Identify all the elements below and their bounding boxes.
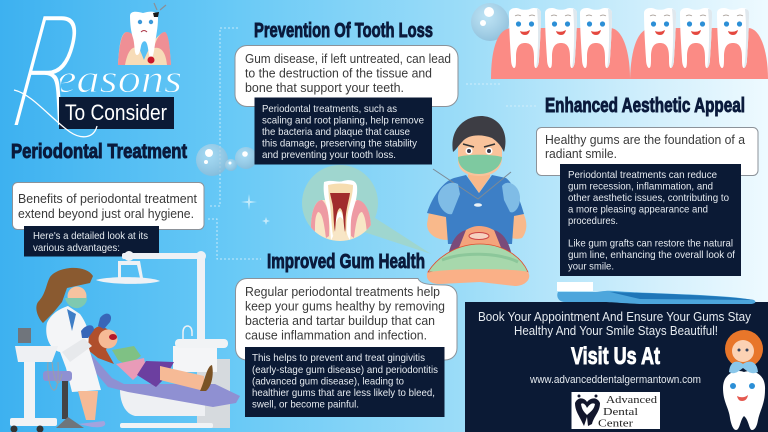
visit us heading: Visit Us At bbox=[571, 343, 660, 370]
icon: dental clinic scene bbox=[10, 251, 240, 432]
eyes bbox=[466, 148, 472, 154]
white card: bone that support your teeth. bbox=[245, 80, 404, 95]
dark card: Periodontal treatments can reduce bbox=[568, 169, 717, 181]
white card bbox=[536, 128, 758, 176]
icon: sad tooth with cavity bbox=[118, 3, 171, 65]
dark card: scaling and root planing, help remove bbox=[262, 114, 424, 126]
icon: tooth with girl bbox=[723, 330, 765, 430]
dark card: other aesthetic issues, contributing to bbox=[568, 192, 729, 204]
logo: Advanced bbox=[606, 394, 658, 406]
dark card: and preventing your tooth loss. bbox=[262, 149, 396, 161]
dark card: your smile. bbox=[568, 260, 614, 272]
website url: www.advanceddentalgermantown.com bbox=[529, 374, 701, 386]
mask bbox=[458, 155, 502, 174]
dark card: procedures. bbox=[568, 215, 618, 227]
title script word: easons bbox=[56, 56, 182, 101]
sparkles bbox=[241, 194, 270, 225]
heading: Prevention Of Tooth Loss bbox=[254, 20, 433, 42]
instrument tray bbox=[10, 328, 62, 432]
icon: tooth cross-section magnifier bbox=[302, 165, 431, 254]
dark card: (advanced gum disease), leading to bbox=[252, 376, 404, 388]
white card: to the destruction of the tissue and bbox=[245, 66, 432, 80]
patient bbox=[88, 326, 213, 391]
dark card: Periodontal treatments, such as bbox=[262, 103, 397, 115]
icon: bubble top bbox=[471, 3, 509, 41]
logo: Center bbox=[598, 418, 633, 430]
appointment text: Healthy And Your Smile Stays Beautiful! bbox=[514, 323, 718, 338]
patient head bbox=[450, 226, 510, 252]
title bbox=[0, 0, 187, 163]
swash bbox=[14, 90, 97, 137]
dark card: (early-stage gum disease) and periodontitis bbox=[252, 364, 438, 376]
logo bbox=[572, 392, 660, 430]
dark card: Like gum grafts can restore the natural bbox=[568, 238, 733, 250]
title script word bbox=[0, 0, 182, 162]
panel: call to action bbox=[465, 302, 768, 432]
dark card: various advantages: bbox=[33, 242, 120, 254]
dark card: This helps to prevent and treat gingivitis bbox=[252, 352, 425, 364]
bubbles left bbox=[196, 144, 257, 176]
dark card: swell, or become painful. bbox=[252, 398, 359, 410]
logo: Dental bbox=[603, 406, 638, 418]
dark card: gum line, enhancing the overall look of bbox=[568, 249, 735, 261]
hair bbox=[452, 116, 505, 152]
appointment text bbox=[478, 309, 751, 338]
blanket bbox=[428, 244, 528, 272]
panel: smiling teeth bbox=[491, 8, 768, 79]
icon: dentist with patient bbox=[427, 116, 529, 286]
dark card bbox=[24, 226, 159, 256]
white card: keep your gums healthy by removing bbox=[245, 298, 445, 314]
arms bbox=[427, 206, 526, 240]
dark card bbox=[560, 164, 741, 276]
panel: enhanced aesthetic appeal bbox=[536, 95, 758, 276]
dark card: the bacteria and plaque that cause bbox=[262, 126, 410, 138]
dark card: Here's a detailed look at its bbox=[33, 230, 148, 242]
white card: radiant smile. bbox=[545, 146, 617, 161]
panel: prevention of tooth loss bbox=[235, 20, 458, 164]
dark card: a more pleasing appearance and bbox=[568, 204, 708, 216]
chair bbox=[76, 342, 240, 407]
white card: Benefits of periodontal treatment bbox=[18, 191, 197, 206]
panel: improved gum health bbox=[236, 251, 457, 417]
dental cabinet and chair base bbox=[120, 326, 230, 428]
periodontal treatment heading: Periodontal Treatment bbox=[11, 141, 187, 163]
dentist bbox=[36, 268, 111, 427]
gloves bbox=[438, 183, 460, 214]
white card: bacteria and tartar buildup that can bbox=[245, 313, 435, 328]
white card bbox=[236, 278, 457, 360]
white card bbox=[12, 182, 204, 230]
lamp arm bbox=[96, 251, 206, 346]
panel: benefits intro bbox=[12, 182, 204, 256]
dark card: this damage, preserving the stability bbox=[262, 138, 418, 150]
white card: cause inflammation and infection. bbox=[245, 328, 427, 342]
white card: Healthy gums are the foundation of a bbox=[545, 132, 746, 147]
white card: Regular periodontal treatments help bbox=[245, 284, 440, 299]
dark card bbox=[245, 347, 444, 417]
dark card: gum recession, inflammation, and bbox=[568, 180, 713, 192]
patient arms bbox=[427, 269, 529, 286]
stool bbox=[43, 371, 84, 428]
dashed connectors bbox=[208, 28, 536, 259]
head bbox=[458, 134, 502, 176]
heading: Improved Gum Health bbox=[267, 251, 425, 273]
white card: extend beyond just oral hygiene. bbox=[18, 206, 194, 221]
neck bbox=[468, 168, 490, 193]
icon: toothbrush bbox=[557, 282, 755, 304]
white card bbox=[235, 46, 458, 106]
instruments bbox=[433, 169, 511, 199]
white card: Gum disease, if left untreated, can lead bbox=[245, 51, 451, 66]
dark card bbox=[254, 98, 432, 164]
dark card: healthier gums that are less likely to bleed, bbox=[252, 387, 435, 399]
to consider label: To Consider bbox=[65, 100, 167, 125]
scrubs bbox=[427, 175, 524, 244]
